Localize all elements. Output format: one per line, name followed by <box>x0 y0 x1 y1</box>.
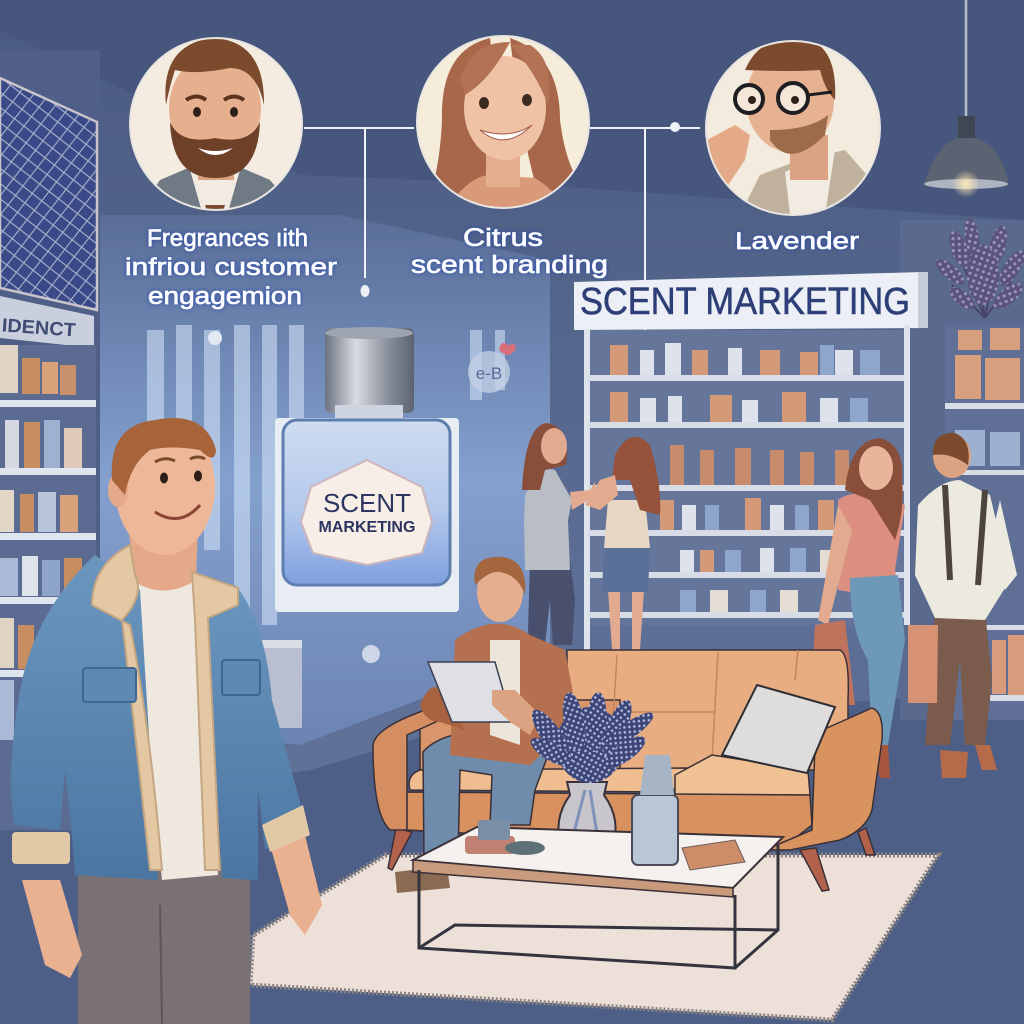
coffee table <box>413 755 783 968</box>
portrait: smiling bearded man <box>130 38 302 215</box>
portrait: woman with long hair <box>417 36 589 210</box>
sofa back <box>567 650 848 770</box>
portrait ring 1 <box>130 38 302 210</box>
connector lines <box>304 123 700 380</box>
decorative light stripes wall <box>147 325 505 625</box>
sofa legs <box>388 828 875 891</box>
perfume label: MARKETING <box>319 519 415 536</box>
hanging lamp <box>924 0 1009 198</box>
wall dots <box>208 331 380 663</box>
right shelving with lavender <box>932 217 1024 720</box>
small floating scent icon <box>468 343 516 393</box>
left arm <box>373 710 440 830</box>
caption: fragrances: engagemion <box>148 283 302 310</box>
rug <box>250 855 938 1020</box>
women at shelf <box>522 423 660 650</box>
pockets <box>83 668 136 702</box>
seat cushions and base <box>409 768 690 792</box>
seated man reading <box>395 557 578 893</box>
caption: citrus: scent branding <box>411 251 608 279</box>
caption: fragrances: Fregrances ıith <box>147 225 308 252</box>
right arm <box>765 708 882 850</box>
centre shelving with products <box>584 325 910 650</box>
perfume bottle <box>275 327 459 612</box>
left shelving unit <box>0 50 100 830</box>
caption: fragrances: infriou customer <box>125 254 337 281</box>
sign: scent marketing: SCENT MARKETING <box>580 281 910 323</box>
lavender vase <box>526 691 658 856</box>
cushion <box>722 685 835 773</box>
perfume label <box>301 460 432 565</box>
portrait ring 3 <box>706 41 880 215</box>
neck and head <box>128 525 198 591</box>
couple walking right <box>810 433 1017 778</box>
perfume label: SCENT <box>323 488 411 518</box>
caption: lavender: Lavender <box>735 228 859 255</box>
man in denim jacket <box>11 418 322 1024</box>
trousers <box>78 860 250 1024</box>
face <box>160 472 168 484</box>
caption: citrus: Citrus <box>463 224 543 252</box>
sofa <box>373 650 882 891</box>
tee <box>130 580 218 880</box>
hands <box>22 880 82 978</box>
jacket left <box>11 555 158 880</box>
portrait ring 2 <box>417 36 589 208</box>
collar <box>92 545 162 870</box>
portrait: man with glasses smelling <box>706 38 880 215</box>
jacket right <box>205 575 305 880</box>
small floating scent icon: e-B <box>476 364 502 383</box>
sign: scent marketing <box>574 272 928 330</box>
left shelving unit: IDENCT <box>1 315 77 342</box>
low pedestal <box>262 640 302 728</box>
